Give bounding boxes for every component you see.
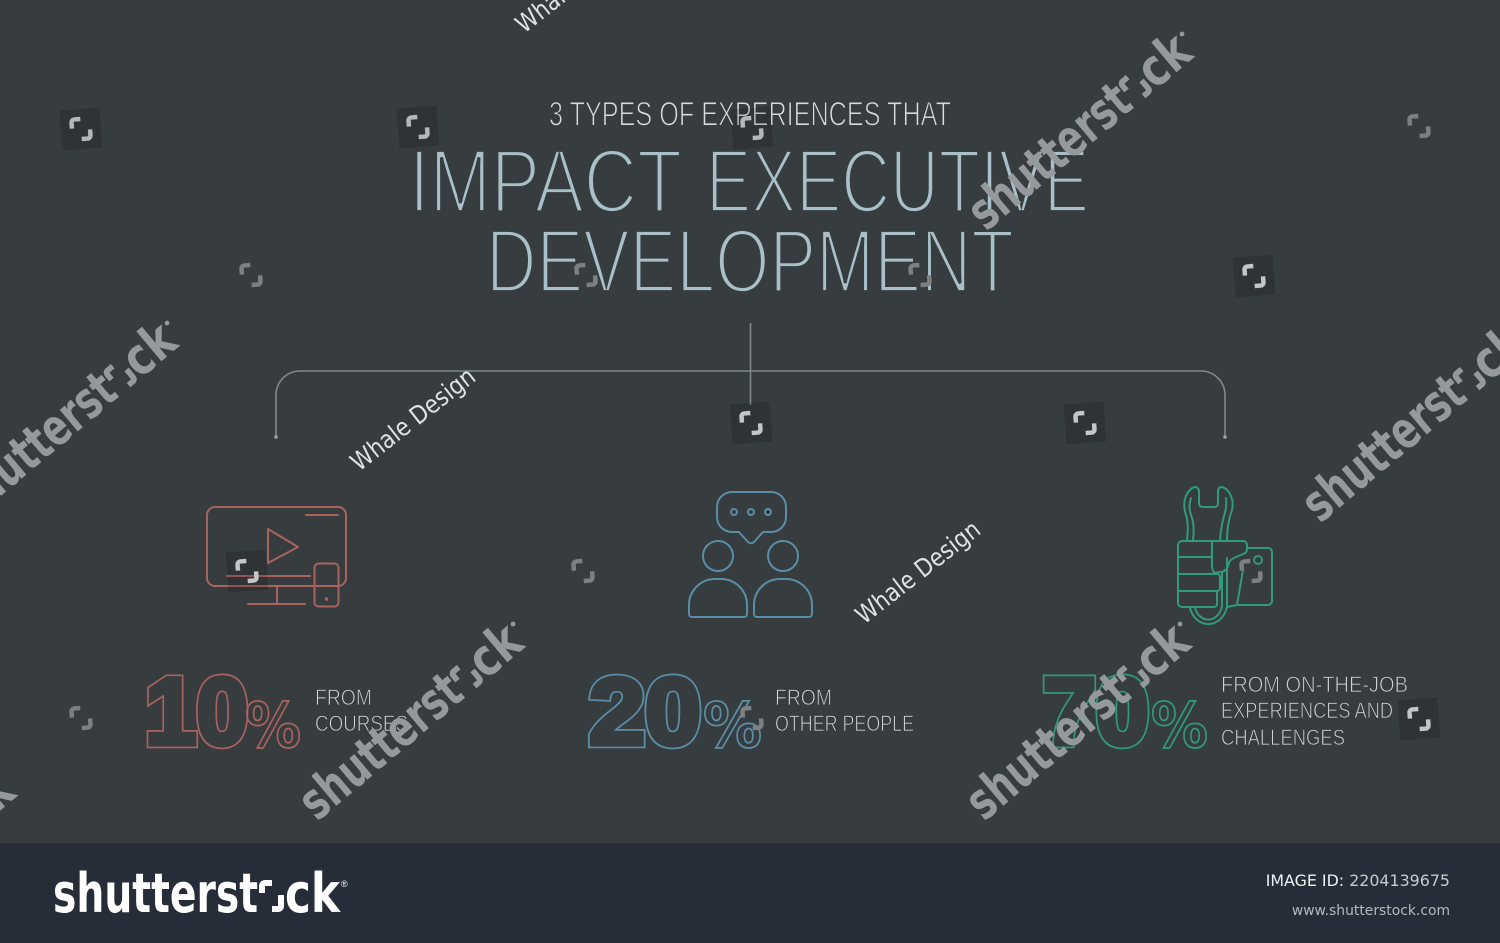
stat: 10% from courses: [145, 659, 408, 765]
stat: 20% from other people: FROM: [775, 685, 832, 710]
stat: 70% from on-the-job experiences and challenges: CHALLENGES: [1221, 725, 1345, 750]
stat: 20% from other people: [589, 659, 914, 765]
stat: 10% from courses: 10: [145, 659, 248, 765]
icon: hand holding wrench: [1178, 487, 1272, 624]
watermark: shutterstock diagonals: ck: [110, 309, 189, 389]
website: www.shutterstock.com: [1292, 903, 1450, 919]
image id: IMAGE ID: 2204139675: [1266, 871, 1450, 890]
footer logo: shutterst: [53, 862, 258, 925]
footer logo: ck: [285, 862, 341, 925]
watermark: shutterstock diagonals: ck: [456, 610, 535, 690]
title: EXECUTIVE: [706, 132, 1089, 232]
footer logo: ®: [341, 879, 348, 889]
watermark marks: [60, 106, 1440, 740]
icon: video monitor: [207, 507, 346, 606]
title: IMPACT: [409, 132, 682, 232]
stat: 70% from on-the-job experiences and challenges: FROM ON-THE-JOB: [1221, 672, 1408, 697]
stat: 10% from courses: COURSES: [315, 711, 408, 736]
stat: 10% from courses: FROM: [315, 685, 372, 710]
icon: two people talking: [689, 492, 812, 617]
footer bar: [0, 843, 1500, 943]
stat: 20% from other people: 20: [589, 659, 701, 765]
stat: 70% from on-the-job experiences and challenges: %: [1151, 689, 1208, 762]
watermark: Whale Design diagonals: Whale Design: [345, 362, 481, 477]
stat: 10% from courses: 10: [145, 659, 248, 765]
title: DEVELOPMENT: [486, 212, 1014, 312]
stat: 20% from other people: 20: [589, 659, 701, 765]
title: [409, 132, 1089, 312]
stat: 70% from on-the-job experiences and challenges: [1043, 659, 1408, 765]
watermark: Whale Design diagonals: [345, 0, 986, 630]
stat: 20% from other people: OTHER PEOPLE: [775, 711, 914, 736]
watermark: shutterstock diagonals: ck: [1125, 20, 1204, 100]
stat: 10% from courses: %: [245, 689, 301, 762]
stat: 70% from on-the-job experiences and challenges: EXPERIENCES AND: [1221, 698, 1393, 723]
stat: 20% from other people: %: [703, 689, 762, 762]
watermark: shutterstock diagonals: shutterst: [287, 661, 475, 832]
watermark: Whale Design diagonals: Whale Design: [850, 515, 986, 630]
watermark: shutterstock diagonals: ck: [1123, 610, 1202, 690]
stat: 70% from on-the-job experiences and challenges: 70: [1043, 659, 1149, 765]
subtitle: 3 TYPES OF EXPERIENCES THAT: [549, 96, 951, 134]
watermark: shutterstock diagonals: shutterst: [954, 661, 1142, 832]
watermark: shutterstock diagonals: shutterst: [956, 71, 1144, 242]
connector bracket: [274, 323, 1227, 439]
stat: 70% from on-the-job experiences and challenges: 70: [1043, 659, 1149, 765]
